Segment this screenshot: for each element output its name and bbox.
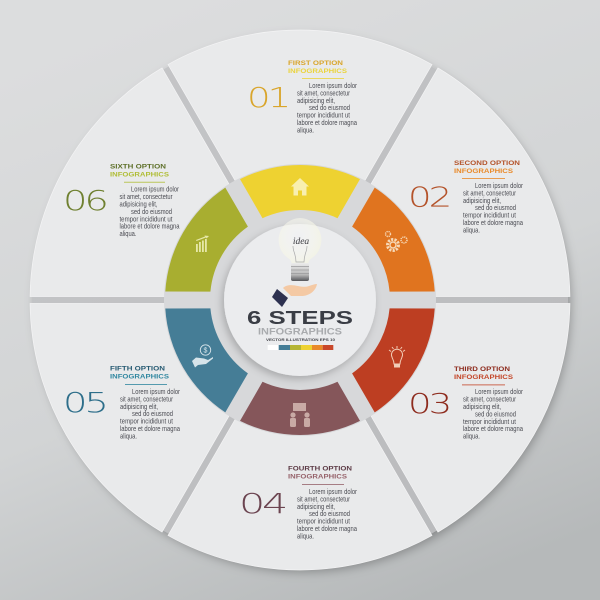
rule (125, 383, 167, 386)
centre illustration: bulb in hand (272, 218, 321, 307)
body (297, 81, 358, 134)
centre title (247, 307, 353, 342)
number 02: 02 (408, 181, 449, 213)
body: aliqua. (120, 229, 136, 238)
text block: fifth option (63, 366, 181, 440)
body: adipisicing elit, (463, 402, 501, 411)
body: sed do eiusmod (132, 409, 173, 418)
bulb glass (279, 218, 321, 266)
text block: first option (247, 60, 358, 134)
body: tempor incididunt ut (297, 111, 350, 120)
body: labore et dolore magna (120, 222, 180, 231)
body (120, 185, 180, 238)
caption: VECTOR ILLUSTRATION EPS 10 (266, 338, 335, 342)
subheading: infographics: INFOGRAPHICS (258, 326, 342, 338)
body: aliqua. (463, 225, 480, 234)
number 04: 04 (239, 488, 285, 520)
body: sed do eiusmod (309, 103, 350, 112)
text block: sixth option (63, 164, 180, 238)
body: aliqua. (297, 531, 314, 540)
body: adipisicing elit, (120, 200, 158, 208)
body: Lorem ipsum dolor (309, 81, 357, 90)
segment: blue (153, 289, 259, 419)
subheading: INFOGRAPHICS (110, 171, 170, 178)
rule (462, 177, 505, 180)
panel: fourth option (168, 419, 432, 570)
segment: orange (341, 181, 447, 311)
body (120, 387, 181, 440)
rule (124, 181, 165, 184)
body: sed do eiusmod (475, 203, 516, 212)
text block: third option (408, 366, 524, 441)
body: aliqua. (120, 431, 137, 440)
body: Lorem ipsum dolor (131, 185, 179, 194)
body: sit amet, consectetur (297, 88, 350, 97)
body: labore et dolore magna (463, 424, 524, 433)
body: Lorem ipsum dolor (309, 487, 357, 496)
heading: FOURTH OPTION (288, 466, 352, 472)
body (463, 181, 524, 234)
body: sit amet, consectetur (120, 192, 173, 201)
subheading: INFOGRAPHICS (454, 168, 514, 175)
heading: SECOND OPTION (454, 160, 520, 167)
body: adipisicing elit, (463, 196, 501, 205)
icon: hand with coin: $ (204, 348, 208, 354)
hand (283, 284, 317, 296)
heading: FIFTH OPTION (110, 366, 165, 372)
rule (302, 77, 344, 80)
body: adipisicing elit, (120, 402, 158, 411)
body: tempor incididunt ut (120, 417, 173, 426)
icon: house (291, 178, 309, 196)
segment: maroon (240, 382, 360, 435)
body: labore et dolore magna (297, 118, 358, 127)
centre circle (224, 224, 376, 376)
body: aliqua. (463, 432, 480, 441)
icon: people and chat (290, 403, 310, 427)
icon: hand with coin (192, 345, 213, 368)
body: sed do eiusmod (475, 409, 516, 418)
body: sit amet, consectetur (297, 494, 350, 503)
body: sed do eiusmod (131, 207, 172, 216)
body: adipisicing elit, (297, 96, 335, 105)
body: Lorem ipsum dolor (475, 387, 523, 396)
body (297, 487, 358, 540)
body (463, 387, 524, 441)
icon: light bulb (389, 346, 405, 367)
panel: sixth option (0, 51, 263, 355)
subheading: INFOGRAPHICS (288, 68, 348, 75)
inner gray ring (164, 164, 436, 436)
subheading: INFOGRAPHICS (288, 473, 348, 480)
panel: third option (337, 245, 600, 549)
heading: FIRST OPTION (288, 60, 343, 67)
body: tempor incididunt ut (120, 214, 172, 223)
coloured ring segments (153, 165, 447, 435)
panel: first option (168, 30, 432, 181)
colour key bar (268, 345, 333, 350)
heading: 6 steps: 6 STEPS (247, 307, 353, 328)
icon: gears (386, 232, 407, 250)
subheading: INFOGRAPHICS (110, 373, 170, 380)
body: sit amet, consectetur (463, 395, 516, 404)
heading: THIRD OPTION (454, 366, 510, 373)
icon: bar chart (196, 236, 209, 252)
body: tempor incididunt ut (297, 517, 350, 526)
segment: red (341, 289, 447, 419)
number 05: 05 (63, 387, 106, 419)
body: Lorem ipsum dolor (475, 181, 523, 190)
rule (462, 384, 505, 386)
base disk behind panels (32, 32, 568, 568)
body: labore et dolore magna (297, 524, 358, 533)
segment: olive (153, 181, 259, 311)
text block: fourth option (239, 466, 358, 540)
rule (302, 483, 344, 486)
body: tempor incididunt ut (463, 211, 516, 220)
number 03: 03 (408, 388, 449, 420)
body: Lorem ipsum dolor (132, 387, 180, 396)
body: adipisicing elit, (297, 502, 335, 511)
heading: SIXTH OPTION (110, 164, 166, 170)
number 01: 01 (247, 82, 288, 114)
bulb screw base (291, 263, 309, 281)
body: aliqua. (297, 125, 314, 134)
bulb inner neck (293, 246, 307, 262)
body: tempor incididunt ut (463, 417, 516, 426)
text block: second option (408, 160, 524, 234)
cuff (272, 289, 288, 307)
idea label: idea (293, 237, 309, 247)
body: sit amet, consectetur (120, 394, 173, 403)
subheading: INFOGRAPHICS (454, 374, 514, 381)
body: sit amet, consectetur (463, 188, 516, 197)
body: labore et dolore magna (463, 218, 524, 227)
panel: second option (337, 51, 600, 355)
body: labore et dolore magna (120, 424, 181, 433)
segment: yellow (240, 165, 360, 218)
body: sed do eiusmod (309, 509, 350, 518)
number 06: 06 (63, 185, 106, 217)
panel: fifth option (0, 245, 263, 549)
